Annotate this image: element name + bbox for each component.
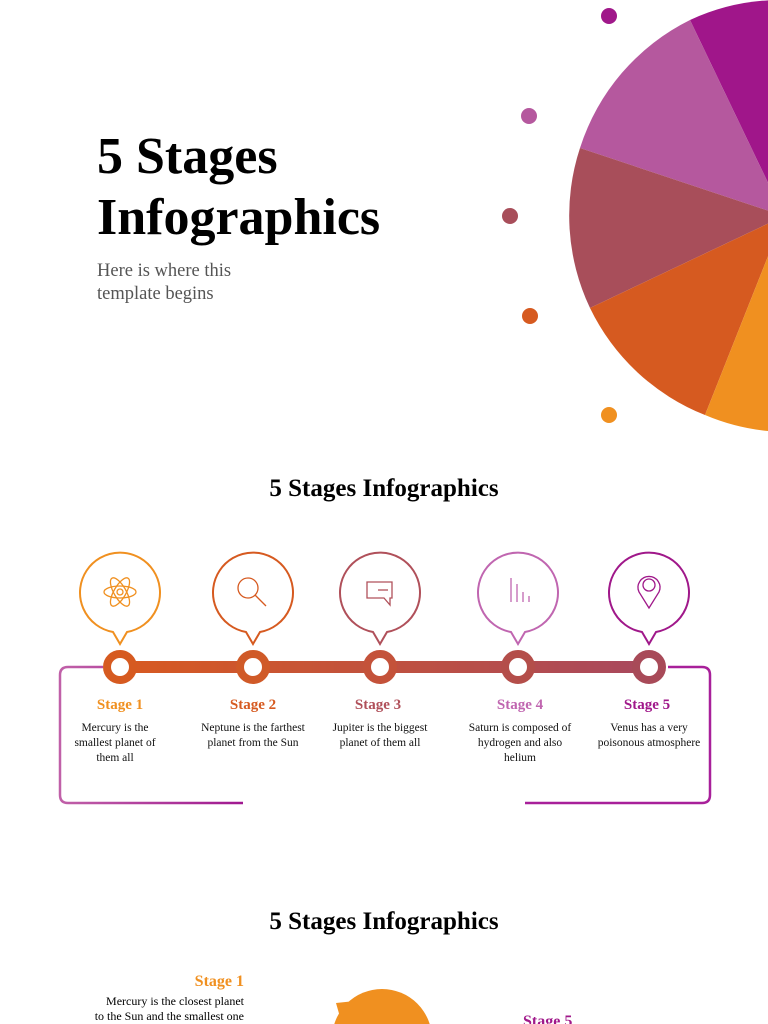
subtitle: template begins: [97, 284, 214, 304]
subtitle: [97, 261, 231, 304]
stage labels: Saturn is composed of hydrogen and also helium: [469, 722, 571, 764]
timeline graphic: [58, 552, 712, 804]
stage labels: Stage 1: [97, 697, 143, 713]
stage labels: Stage 2: [230, 697, 276, 713]
stage labels: Stage 4: [497, 697, 543, 713]
stage 1 bottom: Stage 1: [195, 973, 244, 990]
stage 1 bottom: [94, 973, 244, 1023]
stage labels: Mercury is the smallest planet of them all: [74, 722, 156, 764]
title: [97, 128, 380, 246]
title: 5 Stages: [97, 128, 278, 185]
stage labels: Stage 3: [355, 697, 401, 713]
section heading 2: 5 Stages Infographics: [269, 908, 499, 935]
dots: [502, 8, 617, 423]
pie chart: [569, 0, 768, 431]
stage 1 bottom: Mercury is the closest planet: [106, 994, 244, 1008]
orange bubble: [334, 989, 430, 1024]
icons: [104, 575, 660, 609]
subtitle: Here is where this: [97, 261, 231, 281]
stage labels: Venus has a very poisonous atmosphere: [598, 722, 700, 749]
stage labels: Stage 5: [624, 697, 670, 713]
stage 1 bottom: to the Sun and the smallest one: [95, 1009, 244, 1023]
stage labels: Jupiter is the biggest planet of them all: [333, 722, 427, 749]
title: Infographics: [97, 189, 380, 246]
stage labels: [74, 697, 700, 764]
section heading 1: 5 Stages Infographics: [269, 475, 499, 502]
stage labels: Neptune is the farthest planet from the Sun: [201, 722, 305, 749]
